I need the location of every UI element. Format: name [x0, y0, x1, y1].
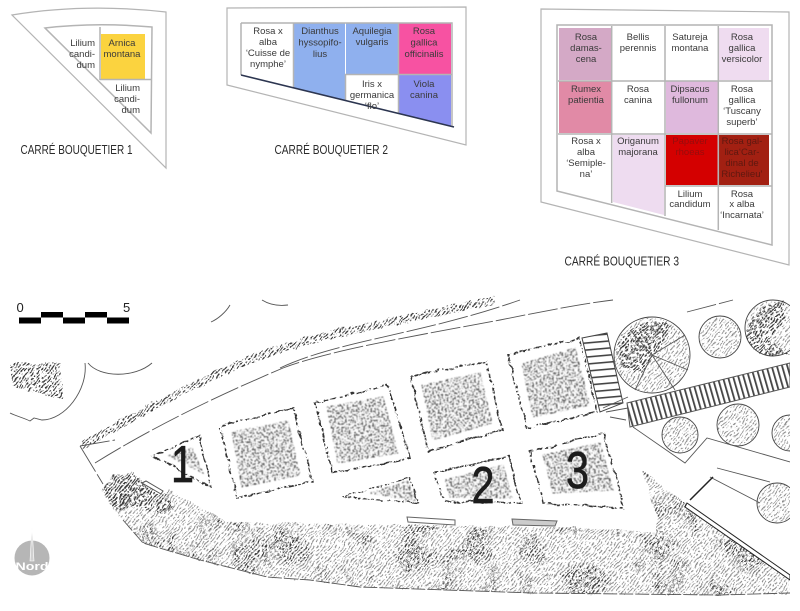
trees	[614, 300, 800, 523]
plant labels: Rosa	[731, 84, 754, 95]
plant labels: gallica	[729, 43, 756, 54]
plant labels: gallica	[729, 95, 756, 106]
tree 3	[744, 300, 790, 356]
plant labels: canina	[410, 90, 439, 101]
plant labels: candidum	[669, 199, 711, 210]
plant cell: Lilium candidum left	[69, 38, 95, 71]
plant labels: damas-	[570, 43, 602, 54]
plant labels: Rosa	[413, 26, 436, 37]
stone benches	[142, 481, 557, 526]
plant cell: Lilium candidum right: dum	[122, 105, 140, 116]
plant labels: Rosa x	[253, 26, 283, 37]
bed outline and grid	[45, 25, 152, 133]
tree 2	[699, 316, 741, 358]
panel: carré bouquetier 1	[12, 8, 166, 168]
plant labels: alba	[259, 37, 278, 48]
compass needle	[30, 527, 34, 561]
bed rectangle D	[508, 338, 597, 428]
plant labels: fullonum	[672, 95, 708, 106]
plant labels: majorana	[618, 147, 659, 158]
plant labels: patientia	[568, 95, 605, 106]
plant labels: Aquilegia	[352, 26, 392, 37]
bed rectangle C	[411, 361, 502, 451]
plant cell: Arnica montana: Arnica	[109, 38, 136, 49]
number 2: 2	[472, 457, 494, 515]
plant labels: Rosa	[731, 32, 754, 43]
bed 2	[434, 456, 521, 503]
bed grid	[241, 23, 452, 127]
number 3: 3	[566, 442, 589, 500]
upper boundary wall	[80, 300, 733, 484]
panel: carré bouquetier 3	[541, 9, 789, 265]
plant labels: gallica	[411, 38, 438, 48]
plot outline	[227, 7, 466, 145]
plant labels: perennis	[620, 43, 656, 54]
plant cell: Lilium candidum left: dum	[77, 60, 95, 71]
plant labels: Dianthus	[301, 26, 339, 37]
plant labels: cena	[576, 54, 597, 65]
colour cells	[294, 23, 451, 126]
plot outline	[12, 8, 166, 168]
bed 3	[530, 433, 624, 508]
scale bar	[16, 300, 130, 324]
plant labels: Rosa gal-	[722, 136, 762, 147]
path edges and terrace strip	[633, 427, 790, 580]
panel: carré bouquetier 2	[227, 7, 466, 145]
plant labels: Origanum	[617, 136, 659, 147]
plant labels: montana	[672, 43, 709, 54]
plot outline	[541, 9, 789, 265]
plant cell: Lilium candidum right: Lilium	[115, 83, 140, 94]
plant labels: lica‘Car-	[725, 147, 759, 158]
plant labels: alba	[577, 147, 596, 158]
plant labels: ‘Tuscany	[723, 106, 761, 117]
plant labels: Viola	[414, 79, 435, 90]
plant labels: Dipsacus	[670, 84, 710, 95]
plant labels: Rumex	[571, 84, 601, 95]
plant labels	[566, 32, 764, 221]
heading: carré bouquetier 3: CARRÉ BOUQUETIER 3	[564, 254, 679, 268]
plant labels: dinal de	[725, 158, 759, 169]
plant labels: x alba	[729, 199, 755, 210]
plant labels: superb’	[726, 117, 758, 128]
small triangular bed	[342, 478, 418, 503]
heading: carré bouquetier 2: CARRÉ BOUQUETIER 2	[274, 142, 388, 157]
plant labels: officinalis	[405, 49, 444, 60]
plant cell: Arnica montana	[101, 34, 145, 79]
plant labels: nymphe’	[250, 59, 286, 70]
plant labels: ‘Cuisse de	[246, 48, 290, 59]
heading: carré bouquetier 1: CARRÉ BOUQUETIER 1	[20, 142, 132, 157]
plant labels: versicolor	[722, 54, 762, 65]
plant cell: Lilium candidum right: candi-	[114, 94, 140, 105]
scale label 5: 5	[123, 300, 130, 315]
bed 1 triangle	[153, 436, 211, 487]
bed rectangle A	[220, 408, 312, 498]
plant labels: Iris x	[362, 79, 382, 90]
plant labels: ‘Incarnata’	[720, 210, 764, 221]
scale label 0: 0	[16, 300, 24, 315]
plant labels: rhoeas	[675, 147, 705, 158]
plant labels: Satureja	[672, 32, 708, 43]
plant cell: Lilium candidum left: Lilium	[70, 38, 95, 49]
plant labels: canina	[624, 95, 653, 106]
plant labels	[246, 26, 444, 112]
tree 5	[717, 404, 759, 446]
plant labels: Rosa	[627, 84, 650, 95]
plant labels: hyssopifo-	[298, 38, 342, 48]
plant labels: Bellis	[627, 32, 650, 43]
staircase	[582, 333, 790, 427]
plant labels: vulgaris	[356, 37, 389, 48]
colour cells	[559, 28, 769, 215]
tree large	[614, 317, 690, 393]
tree 7	[756, 482, 790, 524]
number 1: 1	[171, 436, 194, 494]
plant cell: Lilium candidum right	[114, 83, 140, 116]
north compass	[14, 527, 50, 576]
bed lower edge	[241, 75, 454, 127]
plant labels: Rosa x	[571, 136, 601, 147]
plant cell: Lilium candidum left: candi-	[69, 49, 95, 60]
plant labels: na’	[580, 169, 592, 180]
compass label: Nord	[16, 561, 48, 573]
scale segments	[19, 312, 129, 324]
top-left tree	[10, 300, 288, 421]
plant labels: lius	[313, 49, 327, 60]
plant labels: germanica	[350, 90, 395, 101]
bed grid	[557, 25, 772, 245]
plant labels: Papaver	[672, 136, 708, 147]
hedge, lower planting	[100, 470, 790, 595]
plant labels: ‘flo’	[365, 101, 379, 112]
compass disc	[14, 540, 50, 576]
site plan	[10, 300, 800, 595]
plant cell: Arnica montana: montana	[104, 49, 141, 60]
plant labels: Richelieu’	[721, 169, 763, 180]
plant labels: ‘Semiple-	[566, 158, 606, 169]
tree 6	[772, 414, 790, 452]
bed rectangle B	[315, 385, 410, 473]
plant labels: Rosa	[731, 189, 754, 200]
plant labels: Rosa	[575, 32, 598, 43]
plant labels: Lilium	[678, 189, 702, 200]
tree 4	[662, 417, 698, 453]
